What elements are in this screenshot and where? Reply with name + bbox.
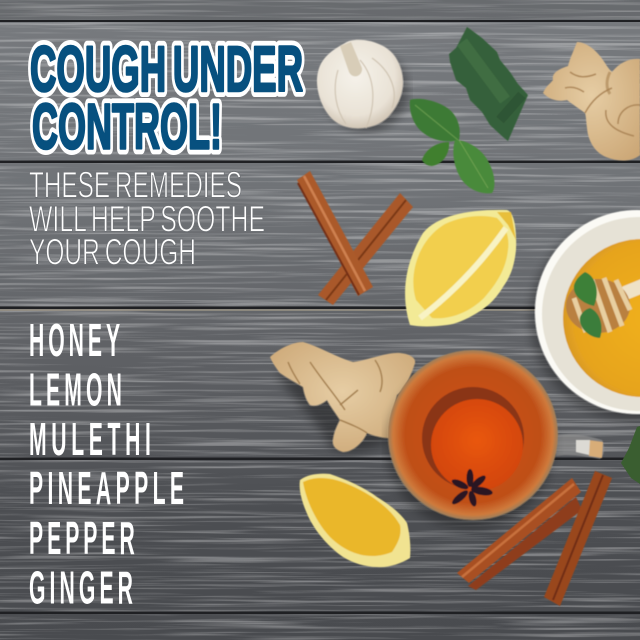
icon: star anise xyxy=(450,469,493,507)
subtitle: WILL HELP SOOTHE xyxy=(29,198,265,240)
remedies list xyxy=(29,315,184,614)
title: cough under control xyxy=(30,33,303,162)
remedies list: LEMON xyxy=(29,364,122,416)
title: cough under control: COUGH UNDER xyxy=(30,33,303,105)
icon: cinnamon bundle bottom right xyxy=(457,471,612,606)
icon: mint sprig xyxy=(410,99,494,193)
icon: fresh ginger root xyxy=(270,342,415,452)
remedies list: PINEAPPLE xyxy=(29,463,184,514)
subtitle: YOUR COUGH xyxy=(29,230,196,272)
icon: wooden dipper and mint xyxy=(566,272,640,338)
subtitle: THESE REMEDIES xyxy=(29,164,242,206)
icon: rolled cinnamon sticks xyxy=(297,171,413,305)
icon: lemon wedge xyxy=(300,474,410,567)
icon: ginger root top right xyxy=(543,42,640,161)
title: cough under control: CONTROL! xyxy=(32,90,222,162)
icon: garlic bulb xyxy=(317,40,408,132)
icon: cup of tea with star anise xyxy=(386,350,604,529)
icon: honey bowl with dipper xyxy=(530,210,640,420)
title: cough under control: COUGH UNDER xyxy=(30,33,303,105)
remedies list: PEPPER xyxy=(29,513,135,564)
icon: lemon half xyxy=(405,210,516,326)
title: cough under control: CONTROL! xyxy=(32,90,222,162)
remedies list: HONEY xyxy=(29,315,120,366)
icon: aloe leaf xyxy=(449,27,528,141)
icon: glass handle xyxy=(556,434,604,459)
remedies list: MULETHI xyxy=(29,414,151,465)
subtitle xyxy=(29,164,265,272)
remedies list: GINGER xyxy=(29,562,133,614)
icon: green leaf at right edge xyxy=(621,426,640,484)
